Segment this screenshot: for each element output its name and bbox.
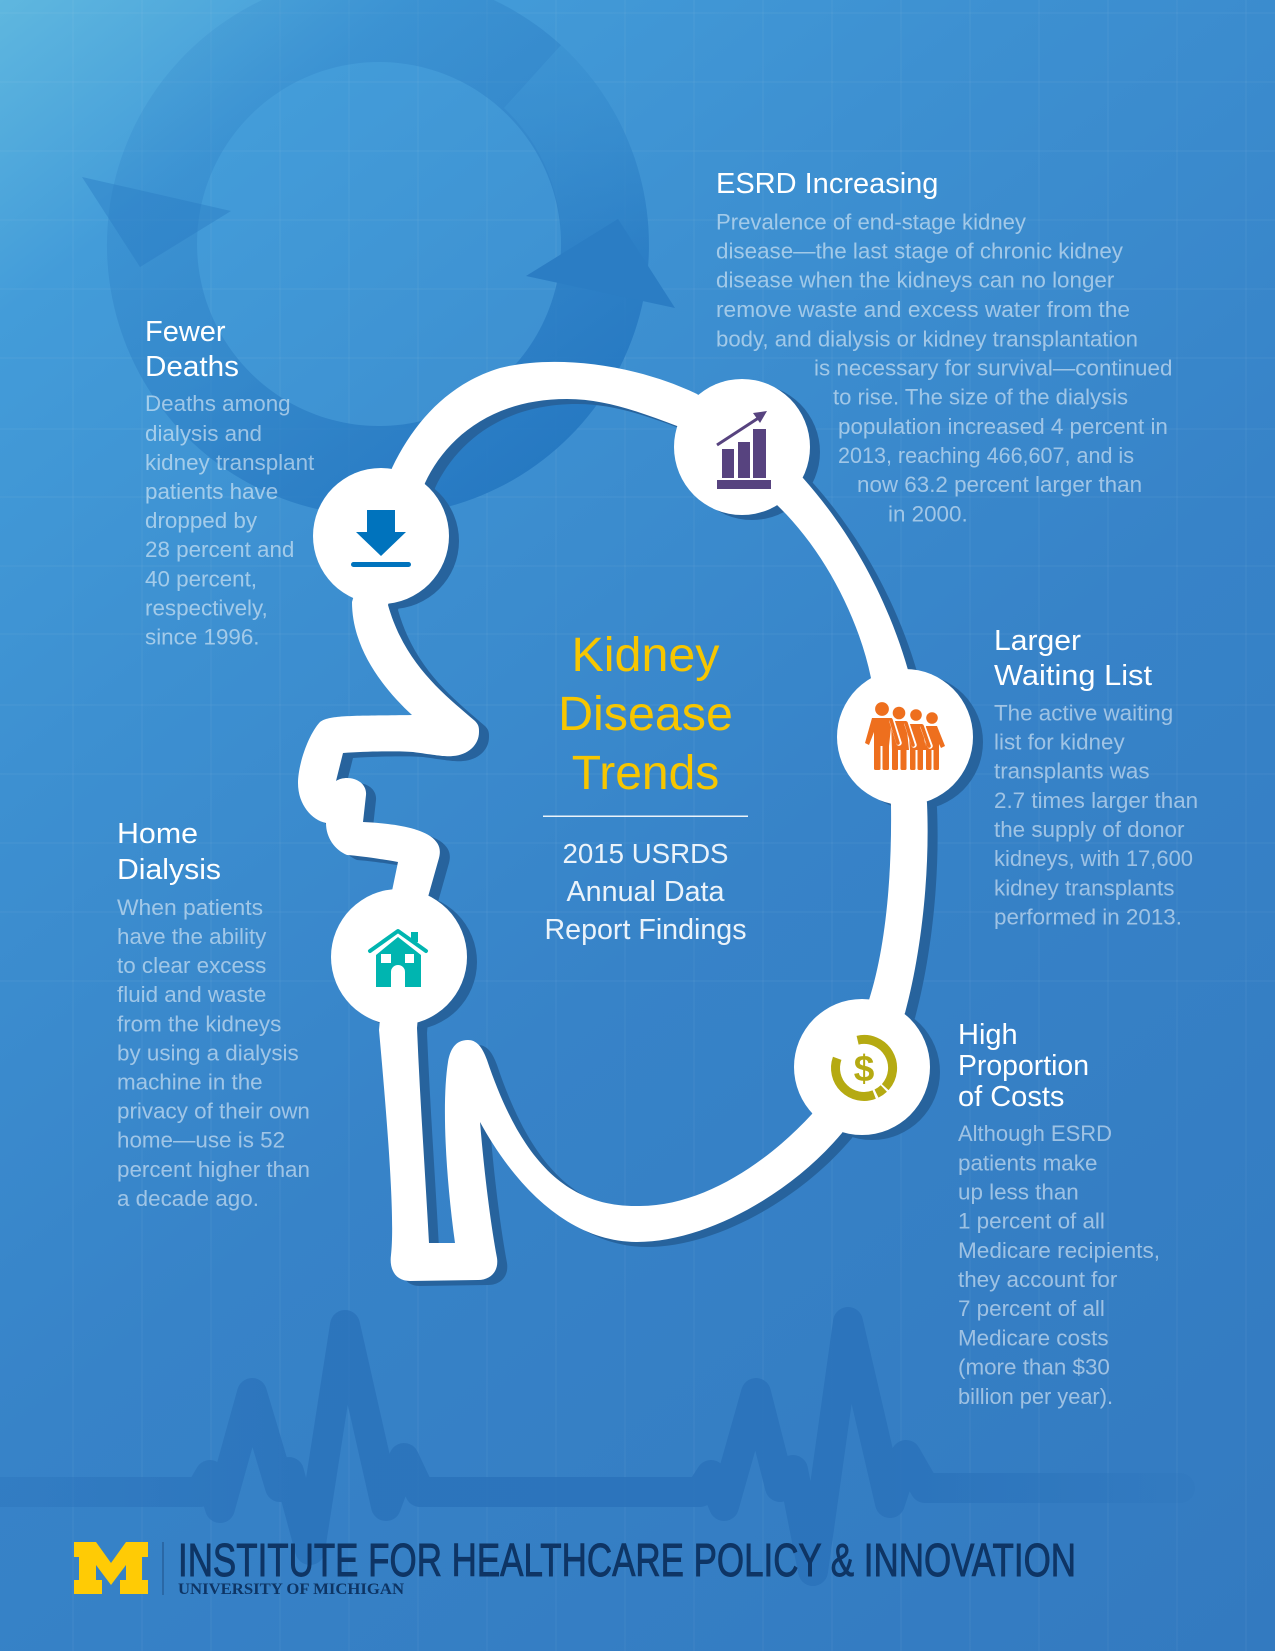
text block: fewer deaths body bbox=[145, 391, 315, 650]
text block: costs body: Medicare recipients, bbox=[958, 1238, 1160, 1263]
text block: home dialysis body: fluid and waste bbox=[117, 982, 266, 1007]
icon: download arrow bbox=[313, 468, 449, 604]
background circular arrows bbox=[82, 0, 675, 516]
text block: fewer deaths body: 40 percent, bbox=[145, 566, 257, 592]
text block: ESRD body: disease—the last stage of chronic kidney bbox=[716, 238, 1124, 264]
icon: dollar ring bbox=[794, 999, 930, 1135]
icon: group of people bbox=[837, 669, 973, 805]
text block: costs body: Medicare costs bbox=[958, 1326, 1109, 1350]
title: Kidney bbox=[572, 628, 720, 682]
text block: ESRD body bbox=[716, 210, 1172, 526]
text block: ESRD body: is necessary for survival—continued bbox=[814, 356, 1172, 380]
text block: ESRD body: Prevalence of end-stage kidney bbox=[716, 210, 1027, 234]
title: Trends bbox=[572, 747, 719, 800]
text block: ESRD body: 2013, reaching 466,607, and is bbox=[838, 443, 1134, 468]
text block: costs body: up less than bbox=[958, 1180, 1079, 1204]
subtitle: Report Findings bbox=[544, 914, 746, 946]
heading: Larger Waiting List bbox=[994, 625, 1152, 692]
text block: waiting list body: performed in 2013. bbox=[994, 904, 1182, 930]
text block: fewer deaths body: patients have bbox=[145, 479, 278, 504]
heading: Home Dialysis: Home bbox=[117, 818, 198, 850]
text block: home dialysis body: have the ability bbox=[117, 924, 267, 949]
text block: fewer deaths body: 28 percent and bbox=[145, 537, 294, 562]
heading: High Proportion of Costs bbox=[958, 1019, 1089, 1113]
panel: home dialysis bbox=[117, 818, 310, 1211]
text block: home dialysis body: When patients bbox=[117, 895, 263, 920]
text block: waiting list body: transplants was bbox=[994, 758, 1150, 784]
icon: block M bbox=[74, 1542, 148, 1594]
subtitle: 2015 USRDS bbox=[562, 838, 728, 869]
heading: Fewer Deaths: Deaths bbox=[145, 351, 239, 383]
text block: ESRD body: in 2000. bbox=[888, 502, 968, 526]
heading: Larger Waiting List: Waiting List bbox=[994, 660, 1152, 692]
subtitle bbox=[544, 838, 746, 946]
heading: High Proportion of Costs: Proportion bbox=[958, 1050, 1089, 1082]
text block: fewer deaths body: kidney transplant bbox=[145, 450, 315, 475]
text block: fewer deaths body: dialysis and bbox=[145, 421, 262, 446]
text block: waiting list body: The active waiting bbox=[994, 700, 1173, 726]
kidney outline bbox=[298, 362, 928, 1281]
text block: home dialysis body: privacy of their own bbox=[117, 1098, 310, 1124]
university name: UNIVERSITY OF MICHIGAN bbox=[178, 1581, 404, 1598]
text block: fewer deaths body: respectively, bbox=[145, 596, 268, 620]
text block: costs body: 1 percent of all bbox=[958, 1208, 1105, 1234]
text block: ESRD body: remove waste and excess water from the bbox=[716, 297, 1130, 322]
heading: High Proportion of Costs: of Costs bbox=[958, 1081, 1064, 1113]
icon: dollar ring: $ bbox=[854, 1048, 875, 1089]
text block: ESRD body: to rise. The size of the dialysis bbox=[833, 384, 1128, 410]
panel: ESRD increasing bbox=[716, 168, 1172, 526]
heading: Home Dialysis: Dialysis bbox=[117, 854, 221, 886]
text block: costs body: 7 percent of all bbox=[958, 1296, 1105, 1321]
text block: waiting list body: kidneys, with 17,600 bbox=[994, 846, 1193, 871]
heading: ESRD Increasing: ESRD Increasing bbox=[716, 168, 938, 200]
text block: costs body: billion per year). bbox=[958, 1384, 1113, 1409]
text block: costs body: patients make bbox=[958, 1150, 1097, 1176]
text block: home dialysis body: by using a dialysis bbox=[117, 1040, 299, 1066]
heading: Fewer Deaths bbox=[145, 316, 239, 383]
title bbox=[558, 628, 733, 800]
text block: ESRD body: disease when the kidneys can no longer bbox=[716, 268, 1115, 292]
heading: Larger Waiting List: Larger bbox=[994, 625, 1081, 657]
text block: waiting list body: list for kidney bbox=[994, 730, 1125, 754]
text block: fewer deaths body: since 1996. bbox=[145, 624, 260, 650]
panel: high proportion of costs bbox=[958, 1019, 1160, 1409]
text block: ESRD body: body, and dialysis or kidney transplantation bbox=[716, 326, 1138, 352]
text block: costs body: Although ESRD bbox=[958, 1121, 1112, 1146]
subtitle: Annual Data bbox=[566, 876, 725, 908]
text block: costs body: they account for bbox=[958, 1267, 1118, 1292]
text block: costs body bbox=[958, 1121, 1160, 1409]
text block: home dialysis body: machine in the bbox=[117, 1070, 263, 1094]
text block: waiting list body: kidney transplants bbox=[994, 876, 1174, 900]
footer logo bbox=[74, 1534, 1076, 1598]
heading: Home Dialysis bbox=[117, 818, 221, 886]
text block: waiting list body bbox=[994, 700, 1198, 930]
text block: waiting list body: the supply of donor bbox=[994, 817, 1185, 842]
text block: home dialysis body: from the kidneys bbox=[117, 1012, 281, 1036]
text block: costs body: (more than $30 bbox=[958, 1354, 1110, 1380]
text block: waiting list body: 2.7 times larger than bbox=[994, 788, 1198, 813]
text block: home dialysis body: a decade ago. bbox=[117, 1186, 259, 1211]
heading: High Proportion of Costs: High bbox=[958, 1019, 1018, 1051]
kidney outline shadow bbox=[308, 367, 983, 1286]
text block: ESRD body: now 63.2 percent larger than bbox=[857, 472, 1142, 497]
text block: home dialysis body: percent higher than bbox=[117, 1157, 310, 1182]
text block: fewer deaths body: Deaths among bbox=[145, 391, 291, 416]
text block: home dialysis body: to clear excess bbox=[117, 953, 266, 978]
heading: Fewer Deaths: Fewer bbox=[145, 316, 226, 348]
panel: fewer deaths bbox=[145, 316, 315, 650]
text block: ESRD body: population increased 4 percent in bbox=[838, 414, 1168, 439]
icon: house bbox=[331, 889, 467, 1025]
panel: larger waiting list bbox=[994, 625, 1198, 930]
icon: rising bar chart bbox=[674, 379, 810, 515]
text block: home dialysis body bbox=[117, 895, 310, 1211]
background heartbeat line bbox=[0, 1322, 1180, 1571]
text block: fewer deaths body: dropped by bbox=[145, 508, 258, 533]
title: Disease bbox=[558, 687, 733, 741]
text block: home dialysis body: home—use is 52 bbox=[117, 1128, 285, 1152]
